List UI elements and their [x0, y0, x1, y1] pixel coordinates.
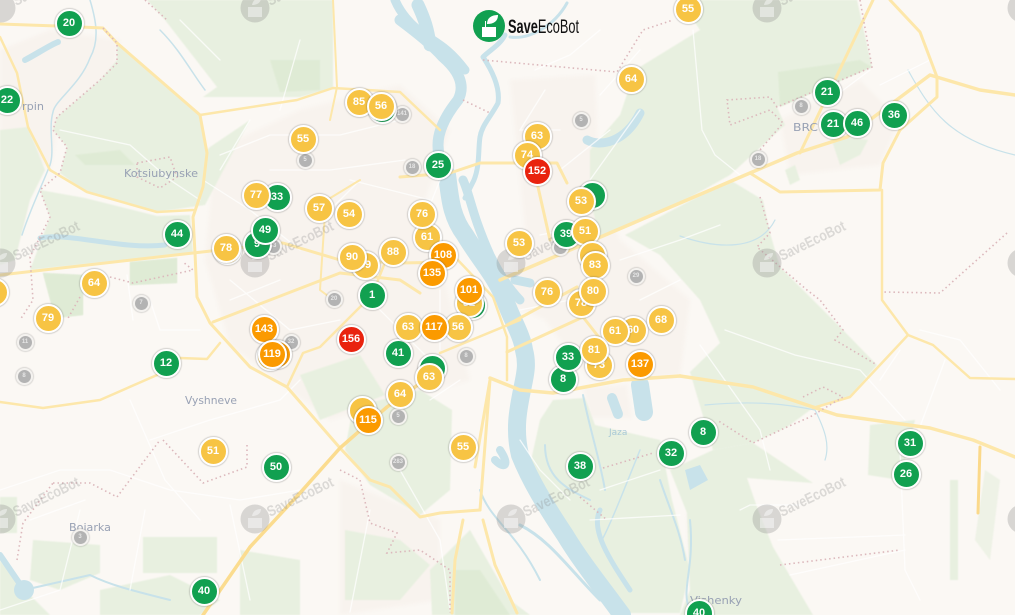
place labels: Jaza: [608, 428, 627, 438]
map of Kyiv air quality: 53: [575, 194, 587, 206]
map of Kyiv air quality: 49: [259, 224, 271, 236]
map of Kyiv air quality: 61: [609, 324, 621, 336]
map of Kyiv air quality: 55: [297, 132, 309, 144]
map of Kyiv air quality: 83: [589, 258, 601, 270]
place labels: Kotsiubynske: [124, 167, 198, 180]
watermark 12: SaveEcoBot: [520, 474, 592, 521]
watermark 14: [1008, 504, 1015, 534]
watermark 12: [496, 474, 592, 534]
map of Kyiv air quality: 25: [432, 158, 444, 170]
map of Kyiv air quality: 26: [900, 468, 912, 480]
map of Kyiv air quality: 53: [513, 236, 525, 248]
map of Kyiv air quality: 36: [888, 108, 900, 120]
place labels: Boiarka: [69, 521, 111, 534]
place labels: Vyshneve: [185, 394, 237, 407]
map of Kyiv air quality: 8: [22, 372, 26, 378]
map of Kyiv air quality: 21: [821, 86, 833, 98]
map of Kyiv air quality: 117: [425, 320, 443, 332]
map of Kyiv air quality: 41: [392, 346, 404, 358]
map of Kyiv air quality: 63: [402, 320, 414, 332]
watermark 7: [496, 218, 592, 278]
map of Kyiv air quality: 63: [531, 130, 543, 142]
watermark 1: [0, 0, 82, 22]
map of Kyiv air quality: 78: [575, 296, 587, 308]
map of Kyiv air quality: 61: [421, 230, 433, 242]
map of Kyiv air quality: 18: [409, 164, 415, 170]
map of Kyiv air quality: 80: [587, 284, 599, 296]
map of Kyiv air quality: 12: [160, 356, 172, 368]
map of Kyiv air quality: 56: [452, 320, 464, 332]
map of Kyiv air quality: 137: [631, 358, 649, 370]
watermark 10: [0, 474, 82, 534]
place labels: Vishenky: [690, 594, 743, 607]
map of Kyiv air quality: 119: [263, 348, 281, 360]
map of Kyiv air quality: 73: [593, 358, 605, 370]
watermark 5: SaveEcoBot: [10, 218, 82, 265]
map of Kyiv air quality: 55: [457, 440, 469, 452]
map of Kyiv air quality: 39: [560, 228, 572, 240]
map of Kyiv air quality: 33: [270, 242, 276, 248]
logo: SaveEcoBot: SaveEcoBot: [508, 17, 579, 38]
map of Kyiv air quality: 1: [369, 288, 375, 300]
map of Kyiv air quality: 79: [42, 312, 54, 324]
map of Kyiv air quality: 68: [655, 314, 667, 326]
map of Kyiv air quality: 152: [528, 164, 546, 176]
watermark 8: [752, 218, 848, 278]
map of Kyiv air quality: 76: [541, 286, 553, 298]
watermark 5: [0, 218, 82, 278]
map of Kyiv air quality: 90: [346, 250, 358, 262]
map of Kyiv air quality: 11: [22, 338, 28, 344]
map of Kyiv air quality: 77: [250, 188, 262, 200]
map of Kyiv air quality: 8: [560, 372, 566, 384]
map of Kyiv air quality: 32: [288, 338, 294, 344]
watermark 13: SaveEcoBot: [776, 474, 848, 521]
map of Kyiv air quality: 7: [139, 300, 143, 306]
place labels: rpin: [22, 100, 44, 113]
map of Kyiv air quality: 64: [625, 72, 637, 84]
map of Kyiv air quality: 33: [271, 190, 283, 202]
map of Kyiv air quality: 20: [331, 296, 337, 302]
map of Kyiv air quality: 5: [396, 412, 400, 418]
map of Kyiv air quality: 38: [574, 460, 586, 472]
map of Kyiv air quality: 31: [904, 436, 916, 448]
watermark 2: [240, 0, 336, 22]
map of Kyiv air quality: 8: [700, 426, 706, 438]
map of Kyiv air quality: 51: [207, 444, 219, 456]
map of Kyiv air quality: 63: [423, 370, 435, 382]
map of Kyiv air quality: 156: [342, 332, 360, 344]
map of Kyiv air quality: 52: [463, 296, 475, 308]
watermark 4: [1008, 0, 1015, 22]
map of Kyiv air quality: 8: [464, 352, 468, 358]
map of Kyiv air quality: 21: [827, 118, 839, 130]
map of Kyiv air quality: 78: [220, 242, 232, 254]
map of Kyiv air quality: 54: [343, 208, 355, 220]
map of Kyiv air quality: 64: [394, 388, 406, 400]
watermark 8: SaveEcoBot: [776, 218, 848, 265]
map of Kyiv air quality: 141: [397, 110, 407, 116]
map of Kyiv air quality: 20: [63, 16, 75, 28]
watermark 11: [240, 474, 336, 534]
watermark 11: SaveEcoBot: [264, 474, 336, 521]
map of Kyiv air quality: 50: [270, 460, 282, 472]
map of Kyiv air quality: 33: [562, 350, 574, 362]
map of Kyiv air quality: 283: [393, 458, 403, 464]
place labels: [22, 100, 818, 607]
map of Kyiv air quality: 18: [755, 156, 761, 162]
map of Kyiv air quality: 5: [303, 156, 307, 162]
map of Kyiv air quality: 5: [579, 116, 583, 122]
watermark 7: SaveEcoBot: [520, 218, 592, 265]
map of Kyiv air quality: 64: [88, 276, 100, 288]
map of Kyiv air quality: 55: [682, 2, 694, 14]
map of Kyiv air quality: 3: [558, 244, 562, 250]
watermark 3: [752, 0, 848, 22]
watermark 9: [1008, 248, 1015, 278]
logo: SaveEcoBot: [473, 10, 579, 42]
map of Kyiv air quality: 9: [254, 238, 260, 250]
map of Kyiv air quality: 76: [416, 208, 428, 220]
map of Kyiv air quality: 3: [78, 534, 82, 540]
grey sensor markers: [15, 97, 902, 547]
watermark 10: SaveEcoBot: [10, 474, 82, 521]
map of Kyiv air quality: 56: [375, 100, 387, 112]
map of Kyiv air quality: 60: [627, 324, 639, 336]
watermark 13: [752, 474, 848, 534]
map of Kyiv air quality: 85: [353, 96, 365, 108]
place labels: BRC: [793, 121, 818, 134]
map of Kyiv air quality: 32: [665, 446, 677, 458]
watermark 6: SaveEcoBot: [264, 218, 336, 265]
map of Kyiv air quality: 143: [255, 322, 273, 334]
map of Kyiv air quality: 44: [171, 228, 183, 240]
map of Kyiv air quality: 22: [1, 94, 13, 106]
map of Kyiv air quality: 89: [359, 258, 371, 270]
map of Kyiv air quality: 88: [387, 246, 399, 258]
watermark 6: [240, 218, 336, 278]
map of Kyiv air quality: 57: [313, 202, 325, 214]
map of Kyiv air quality: 51: [579, 224, 591, 236]
map of Kyiv air quality: 101: [460, 284, 478, 296]
map of Kyiv air quality: 108: [434, 248, 452, 260]
map of Kyiv air quality: 135: [423, 266, 441, 278]
map of Kyiv air quality: 74: [521, 148, 533, 160]
darker forest patches: [43, 60, 872, 615]
map of Kyiv air quality: 40: [198, 584, 210, 596]
map of Kyiv air quality: 29: [633, 272, 639, 278]
map of Kyiv air quality: 46: [851, 116, 863, 128]
map of Kyiv air quality: 115: [359, 414, 377, 426]
map of Kyiv air quality: 81: [588, 344, 600, 356]
map of Kyiv air quality: 8: [799, 102, 803, 108]
